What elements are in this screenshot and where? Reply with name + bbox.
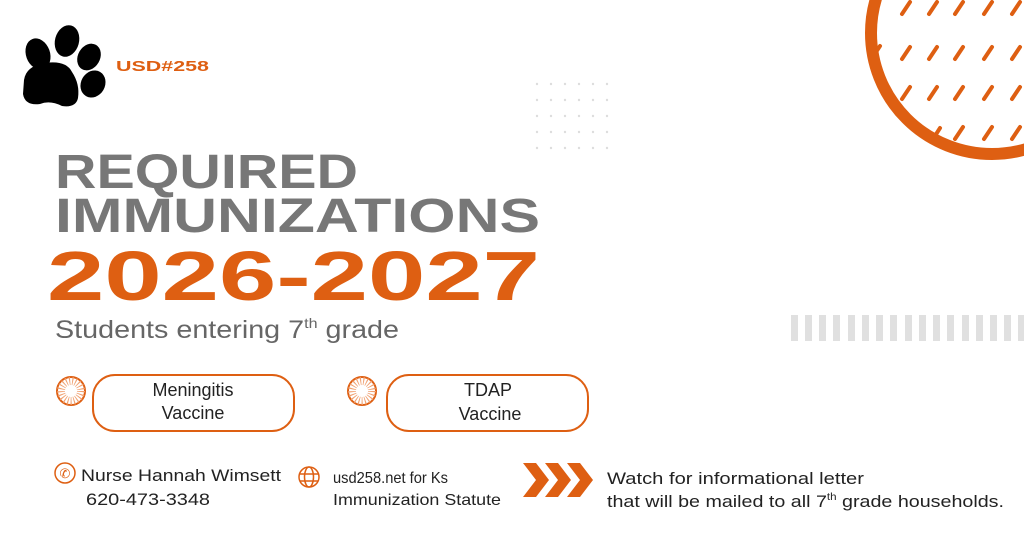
decorative circle top right [871, 0, 1024, 154]
contact: nurse: 620-473-3348 [86, 490, 210, 509]
logo text: USD#258 [116, 58, 209, 75]
contact: website: usd258.net for Ks [333, 470, 448, 487]
panel: tdap vaccine [348, 375, 588, 431]
contact: website [299, 467, 501, 509]
subtitle: Students entering 7 [55, 316, 272, 344]
panel: tdap vaccine: TDAP [464, 380, 512, 400]
note text: that will be mailed to all 7 [607, 492, 797, 511]
decorative dot grid [536, 83, 608, 149]
icon: paw print logo [21, 22, 110, 106]
arrow: chevrons [523, 463, 593, 497]
title [55, 146, 540, 243]
note text: th [827, 492, 837, 503]
subtitle: grade [318, 316, 399, 344]
note text [607, 469, 1004, 511]
panel: meningitis vaccine: Vaccine [162, 403, 224, 423]
subtitle: th [304, 315, 318, 331]
panel: meningitis vaccine [57, 375, 294, 431]
contact: nurse [55, 463, 281, 509]
contact: nurse: ✆ [60, 466, 71, 481]
title: REQUIRED [55, 146, 358, 199]
contact: nurse: Nurse Hannah Wimsett [81, 466, 281, 485]
title: IMMUNIZATIONS [55, 190, 540, 243]
year heading: 2026-2027 [47, 237, 540, 315]
note text: grade households. [837, 492, 1004, 511]
note text: Watch for informational letter [607, 469, 864, 488]
decorative stripes [791, 315, 1024, 341]
panel: tdap vaccine: Vaccine [459, 404, 521, 424]
contact: website: Immunization Statute [333, 492, 501, 509]
panel: meningitis vaccine: Meningitis [152, 380, 234, 400]
